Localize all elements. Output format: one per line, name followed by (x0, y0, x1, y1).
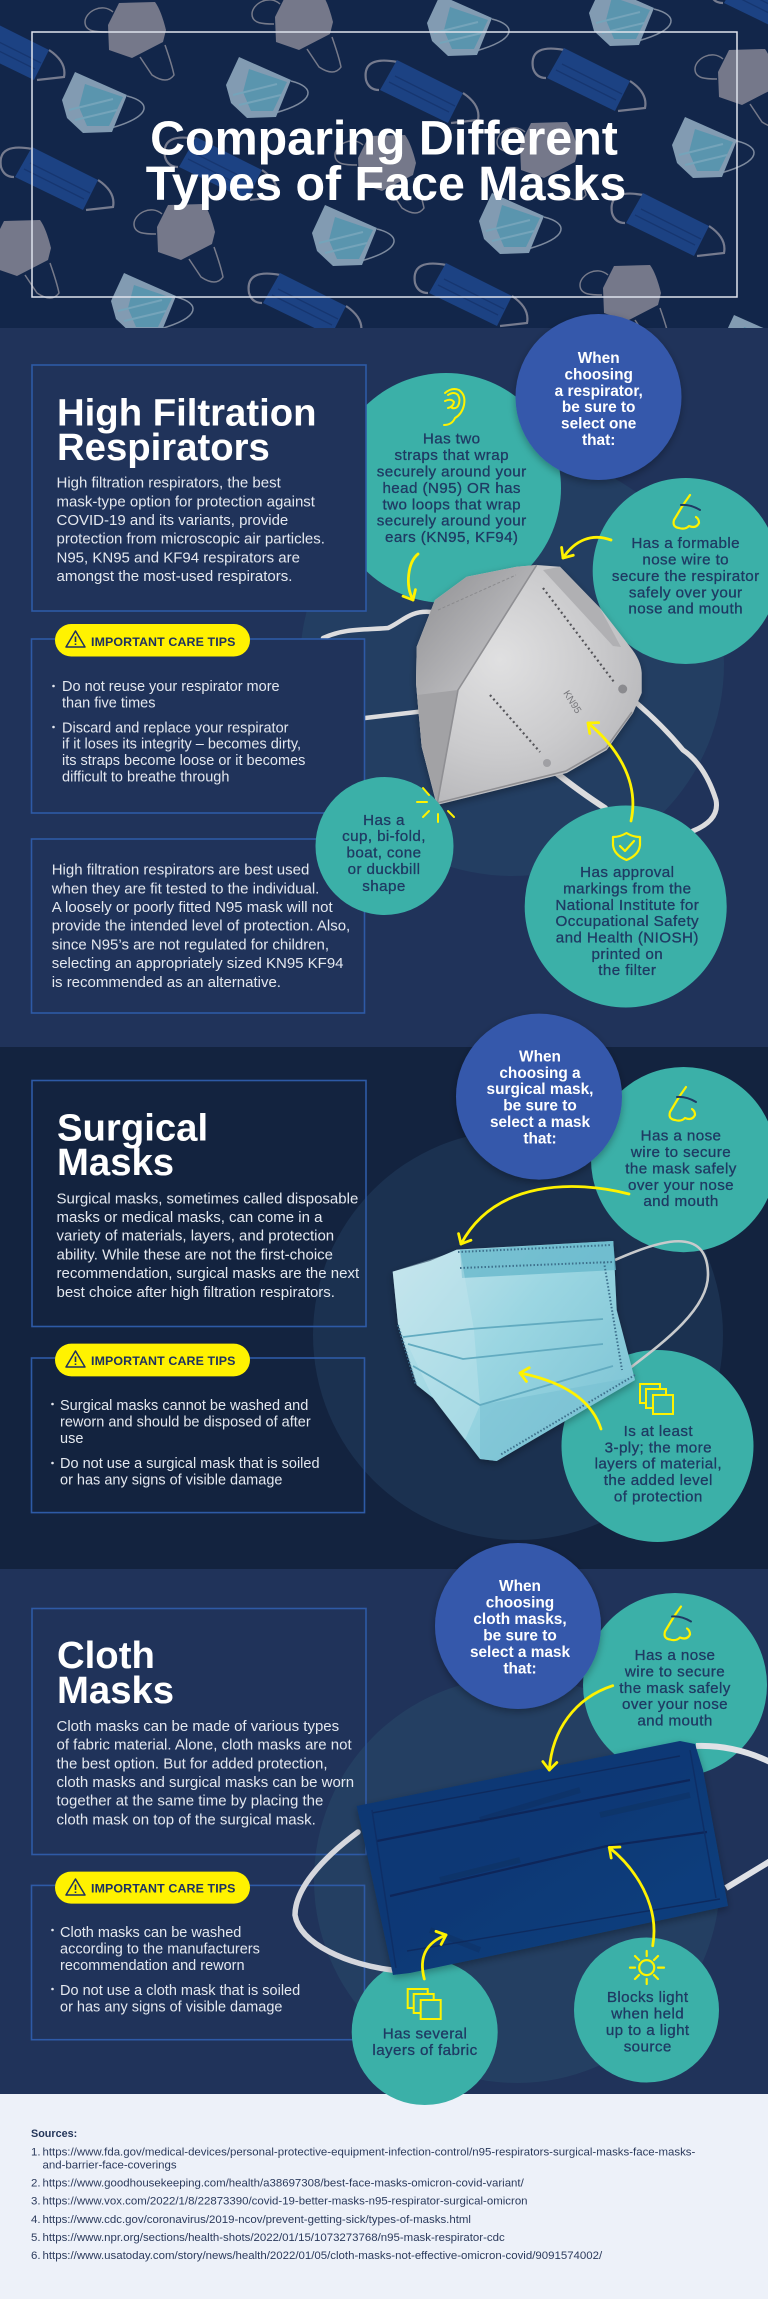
pill: important care tips (55, 624, 250, 656)
text box: fit testing: is recommended as an alternative. (52, 974, 281, 991)
sources heading: Sources: (31, 2128, 77, 2140)
body text: the best option. But for added protection, (56, 1755, 328, 1772)
callout: 3-ply (562, 1350, 754, 1542)
callout: layers (352, 1959, 498, 2105)
text box: intro (32, 1608, 366, 1854)
body text: Surgical masks, sometimes called disposable (56, 1190, 358, 1207)
body text: COVID-19 and its variants, provide (56, 512, 288, 529)
bullets: Do not reuse your respirator more (62, 679, 280, 695)
callout: blocks light: when held (610, 2006, 684, 2023)
body text: together at the same time by placing the (56, 1793, 323, 1810)
body text: cloth masks and surgical masks can be worn (56, 1774, 354, 1791)
callout: nose wire: Has a formable (631, 535, 740, 552)
callout: when choosing a respirator: choosing (564, 366, 633, 383)
cloth mask (295, 1741, 768, 1975)
callout: blocks light: up to a light (606, 2022, 690, 2039)
callout: approval markings (525, 806, 727, 1008)
body text: amongst the most-used respirators. (56, 568, 292, 585)
body text: High filtration respirators, the best (56, 475, 282, 492)
pill: important care tips: IMPORTANT CARE TIPS (91, 1882, 236, 1896)
printed marking: KN95 (560, 689, 583, 716)
text box: fit testing: selecting an appropriately sized KN95 KF94 (52, 955, 344, 972)
callout: 3-ply: the added level (604, 1472, 713, 1489)
callout: when choosing a respirator: select one (561, 416, 637, 433)
body text: recommendation, surgical masks are the next (56, 1265, 360, 1282)
text box: fit testing: since N95’s are not regulated for children, (52, 936, 329, 953)
text box: care tips (32, 1872, 364, 2040)
text box: fit testing: provide the intended level of protection. Also, (52, 918, 350, 935)
callout: shape: shape (362, 878, 406, 895)
text box: care tips (32, 1344, 364, 1513)
sources panel (0, 2094, 768, 2299)
callout: shape: or duckbill (348, 861, 420, 878)
sources list: https://www.usatoday.com/story/news/health/2022/01/05/cloth-masks-not-effective-omicron-covid/9091574002/ (42, 2250, 603, 2262)
icon: sun (630, 1951, 664, 1984)
text box: fit testing: High filtration respirators are best used (52, 862, 309, 879)
callout: approval markings: and Health (NIOSH) (556, 930, 699, 947)
callout: straps: two loops that wrap (382, 496, 521, 513)
bullets (51, 1398, 320, 1488)
callout: when choosing a respirator: When (578, 350, 620, 367)
surgical mask (393, 1241, 708, 1461)
callout: when choosing a surgical mask: When (519, 1049, 561, 1066)
callout: when choosing a surgical mask: surgical mask, (487, 1081, 593, 1098)
callout: when choosing a surgical mask: select a mask (490, 1114, 590, 1131)
bullets: use (60, 1431, 83, 1447)
callout: nose wire: nose wire to (642, 552, 729, 568)
bullets: Do not use a surgical mask that is soiled (60, 1456, 320, 1472)
bullets: reworn and should be disposed of after (60, 1414, 311, 1430)
icon: nose (674, 495, 700, 529)
bullets: or has any signs of visible damage (60, 1999, 282, 2015)
callout: nose wire (583, 1593, 767, 1777)
sources list: 3. (31, 2196, 44, 2208)
callout: nose wire: wire to secure (630, 1144, 731, 1161)
sources list: 4. (31, 2214, 44, 2226)
bullets: if it loses its integrity – becomes dirty, (62, 737, 301, 753)
sources list: and-barrier-face-coverings (42, 2160, 177, 2172)
callout: nose wire: over your nose (622, 1696, 728, 1713)
callout: straps: straps that wrap (394, 447, 509, 464)
bullets: recommendation and reworn (60, 1958, 245, 1974)
body text: ability. While these are not the first-choice (56, 1246, 333, 1263)
icon: nose (665, 1606, 691, 1640)
bullets (52, 679, 305, 785)
text box: care tips (32, 624, 364, 813)
callout: when choosing cloth masks: that: (503, 1660, 537, 1677)
bullets: its straps become loose or it becomes (62, 753, 305, 769)
text box: intro (32, 1080, 366, 1326)
sources list: 1. (31, 2147, 44, 2159)
callout: approval markings: National Institute for (555, 897, 699, 914)
icon: rays (417, 788, 454, 822)
callout: nose wire: the mask safely (625, 1160, 737, 1178)
callout: nose wire: Has a nose (635, 1647, 715, 1664)
sources list: 5. (31, 2232, 44, 2244)
title: Comparing Different (150, 112, 618, 166)
body text: protection from microscopic air particles. (56, 531, 325, 548)
callout: nose wire: wire to secure (624, 1663, 725, 1680)
bullets: Discard and replace your respirator (62, 720, 289, 736)
panel: high filtration respirators (0, 314, 768, 1047)
bullets: Surgical masks cannot be washed and (60, 1398, 308, 1414)
callout: 3-ply: Is at least (624, 1423, 693, 1440)
arrows (461, 1186, 629, 1429)
callout: 3-ply: layers of material, (595, 1456, 722, 1473)
heading: Masks (57, 1669, 174, 1712)
body text: best choice after high filtration respirators. (56, 1284, 335, 1301)
callout: nose wire (593, 478, 768, 664)
bullets: Cloth masks can be washed (60, 1925, 241, 1941)
callout: when choosing a respirator: a respirator, (555, 383, 643, 400)
callout: straps (331, 373, 561, 603)
KN95 respirator (323, 565, 717, 831)
callout: straps: securely around your (377, 513, 527, 530)
callout: approval markings: markings from the (563, 880, 691, 897)
pill: important care tips (55, 1872, 250, 1904)
callout: nose wire: and mouth (637, 1713, 713, 1730)
bullets: Do not use a cloth mask that is soiled (60, 1983, 300, 1999)
callout: when choosing cloth masks: be sure to (483, 1628, 557, 1645)
callout: when choosing cloth masks: cloth masks, (473, 1611, 567, 1628)
callout: when choosing a respirator: be sure to (562, 399, 635, 416)
callout: when choosing a respirator (516, 314, 682, 480)
callout: blocks light: source (624, 2039, 672, 2056)
callout: when choosing a surgical mask: be sure to (503, 1098, 577, 1115)
callout: nose wire: and mouth (643, 1193, 719, 1210)
heading: Cloth (57, 1634, 155, 1677)
sources list: https://www.goodhousekeeping.com/health/a38697308/best-face-masks-omicron-covid-variant/ (42, 2178, 525, 2190)
body text: cloth mask on top of the surgical mask. (56, 1811, 316, 1828)
callout: approval markings: printed on (592, 946, 663, 963)
body text: of fabric material. Alone, cloth masks are not (56, 1737, 352, 1754)
icon: shield (613, 833, 640, 860)
text box: fit testing: when they are fit tested to the individual. (51, 880, 319, 897)
pill: important care tips: IMPORTANT CARE TIPS (91, 1354, 236, 1368)
callout: straps: securely around your (377, 464, 527, 480)
title: Types of Face Masks (146, 157, 626, 211)
bullets: or has any signs of visible damage (60, 1472, 282, 1488)
callout: nose wire (591, 1067, 768, 1252)
callout: layers: Has several (383, 2026, 467, 2043)
bullets (51, 1925, 300, 2015)
heading: High Filtration (57, 392, 317, 435)
heading: Surgical (57, 1106, 208, 1149)
icon: layers (640, 1384, 673, 1414)
heading: Masks (57, 1141, 174, 1184)
callout: 3-ply: of protection (614, 1488, 703, 1506)
callout: straps: head (N95) OR has (382, 480, 521, 497)
callout: shape (316, 777, 454, 915)
callout: layers: layers of fabric (372, 2042, 478, 2059)
body text: Cloth masks can be made of various types (56, 1718, 339, 1735)
callout: shape: Has a (363, 812, 405, 829)
sources list: https://www.vox.com/2022/1/8/22873390/covid-19-better-masks-n95-respirator-surgical-omicron (42, 2196, 528, 2208)
callout: when choosing cloth masks: select a mask (470, 1644, 570, 1661)
bullets: according to the manufacturers (60, 1942, 260, 1958)
callout: approval markings: the filter (598, 962, 656, 979)
callout: when choosing cloth masks: choosing (486, 1594, 554, 1612)
callout: nose wire: secure the respirator (612, 568, 760, 585)
text box: fit testing (32, 839, 364, 1013)
callout: when choosing cloth masks (435, 1543, 601, 1709)
header panel (0, 0, 768, 376)
callout: when choosing a surgical mask: that: (523, 1130, 557, 1147)
pill: important care tips: IMPORTANT CARE TIPS (91, 635, 236, 649)
pill: important care tips (55, 1344, 250, 1376)
callout: shape: cup, bi-fold, (342, 828, 426, 845)
sources list: 2. (31, 2178, 44, 2190)
text box: fit testing: A loosely or poorly fitted N95 mask will not (52, 899, 333, 916)
text box: intro (32, 365, 366, 611)
bullets: difficult to breathe through (62, 769, 229, 785)
callout: approval markings: Occupational Safety (556, 913, 699, 930)
icon: ear (444, 389, 464, 425)
sources list: https://www.cdc.gov/coronavirus/2019-ncov/prevent-getting-sick/types-of-masks.html (42, 2214, 471, 2226)
icon: layers (408, 1989, 441, 2019)
callout: straps: Has two (423, 431, 481, 448)
body text: masks or medical masks, can come in a (56, 1209, 323, 1226)
callout: nose wire: over your nose (628, 1177, 734, 1194)
callout: nose wire: safely over your (629, 584, 743, 602)
callout: 3-ply: 3-ply; the more (605, 1439, 712, 1456)
callout: nose wire: the mask safely (619, 1680, 731, 1697)
callout: blocks light (574, 1938, 719, 2082)
sources list: https://www.fda.gov/medical-devices/personal-protective-equipment-infection-control/n95-respirators-surgical-masks-face-masks- (42, 2147, 696, 2159)
callout: when choosing a surgical mask: choosing a (499, 1065, 581, 1082)
callout: shape: boat, cone (347, 845, 421, 862)
background mask pattern (0, 0, 768, 376)
callout: straps: ears (KN95, KF94) (385, 529, 518, 546)
panel: surgical masks (0, 1014, 768, 1569)
callout: nose wire: Has a nose (641, 1128, 721, 1145)
callout: when choosing a surgical mask (456, 1014, 622, 1180)
arrows (408, 537, 633, 821)
body text: variety of materials, layers, and protection (56, 1228, 334, 1245)
sources list: 6. (31, 2250, 44, 2262)
heading: Respirators (57, 426, 270, 469)
panel: cloth masks (0, 1543, 768, 2105)
callout: blocks light: Blocks light (607, 1989, 689, 2006)
callout: nose wire: nose and mouth (628, 601, 743, 618)
body text: mask-type option for protection against (56, 493, 316, 510)
callout: approval markings: Has approval (580, 864, 674, 881)
sources list: https://www.npr.org/sections/health-shots/2022/01/15/1073273768/n95-mask-respirator-cdc (42, 2232, 505, 2244)
bullets: than five times (62, 696, 156, 712)
body text: N95, KN95 and KF94 respirators are (56, 549, 300, 566)
icon: nose (670, 1087, 696, 1121)
callout: when choosing cloth masks: When (499, 1578, 541, 1595)
arrows (422, 1686, 654, 1979)
callout: when choosing a respirator: that: (582, 432, 615, 449)
